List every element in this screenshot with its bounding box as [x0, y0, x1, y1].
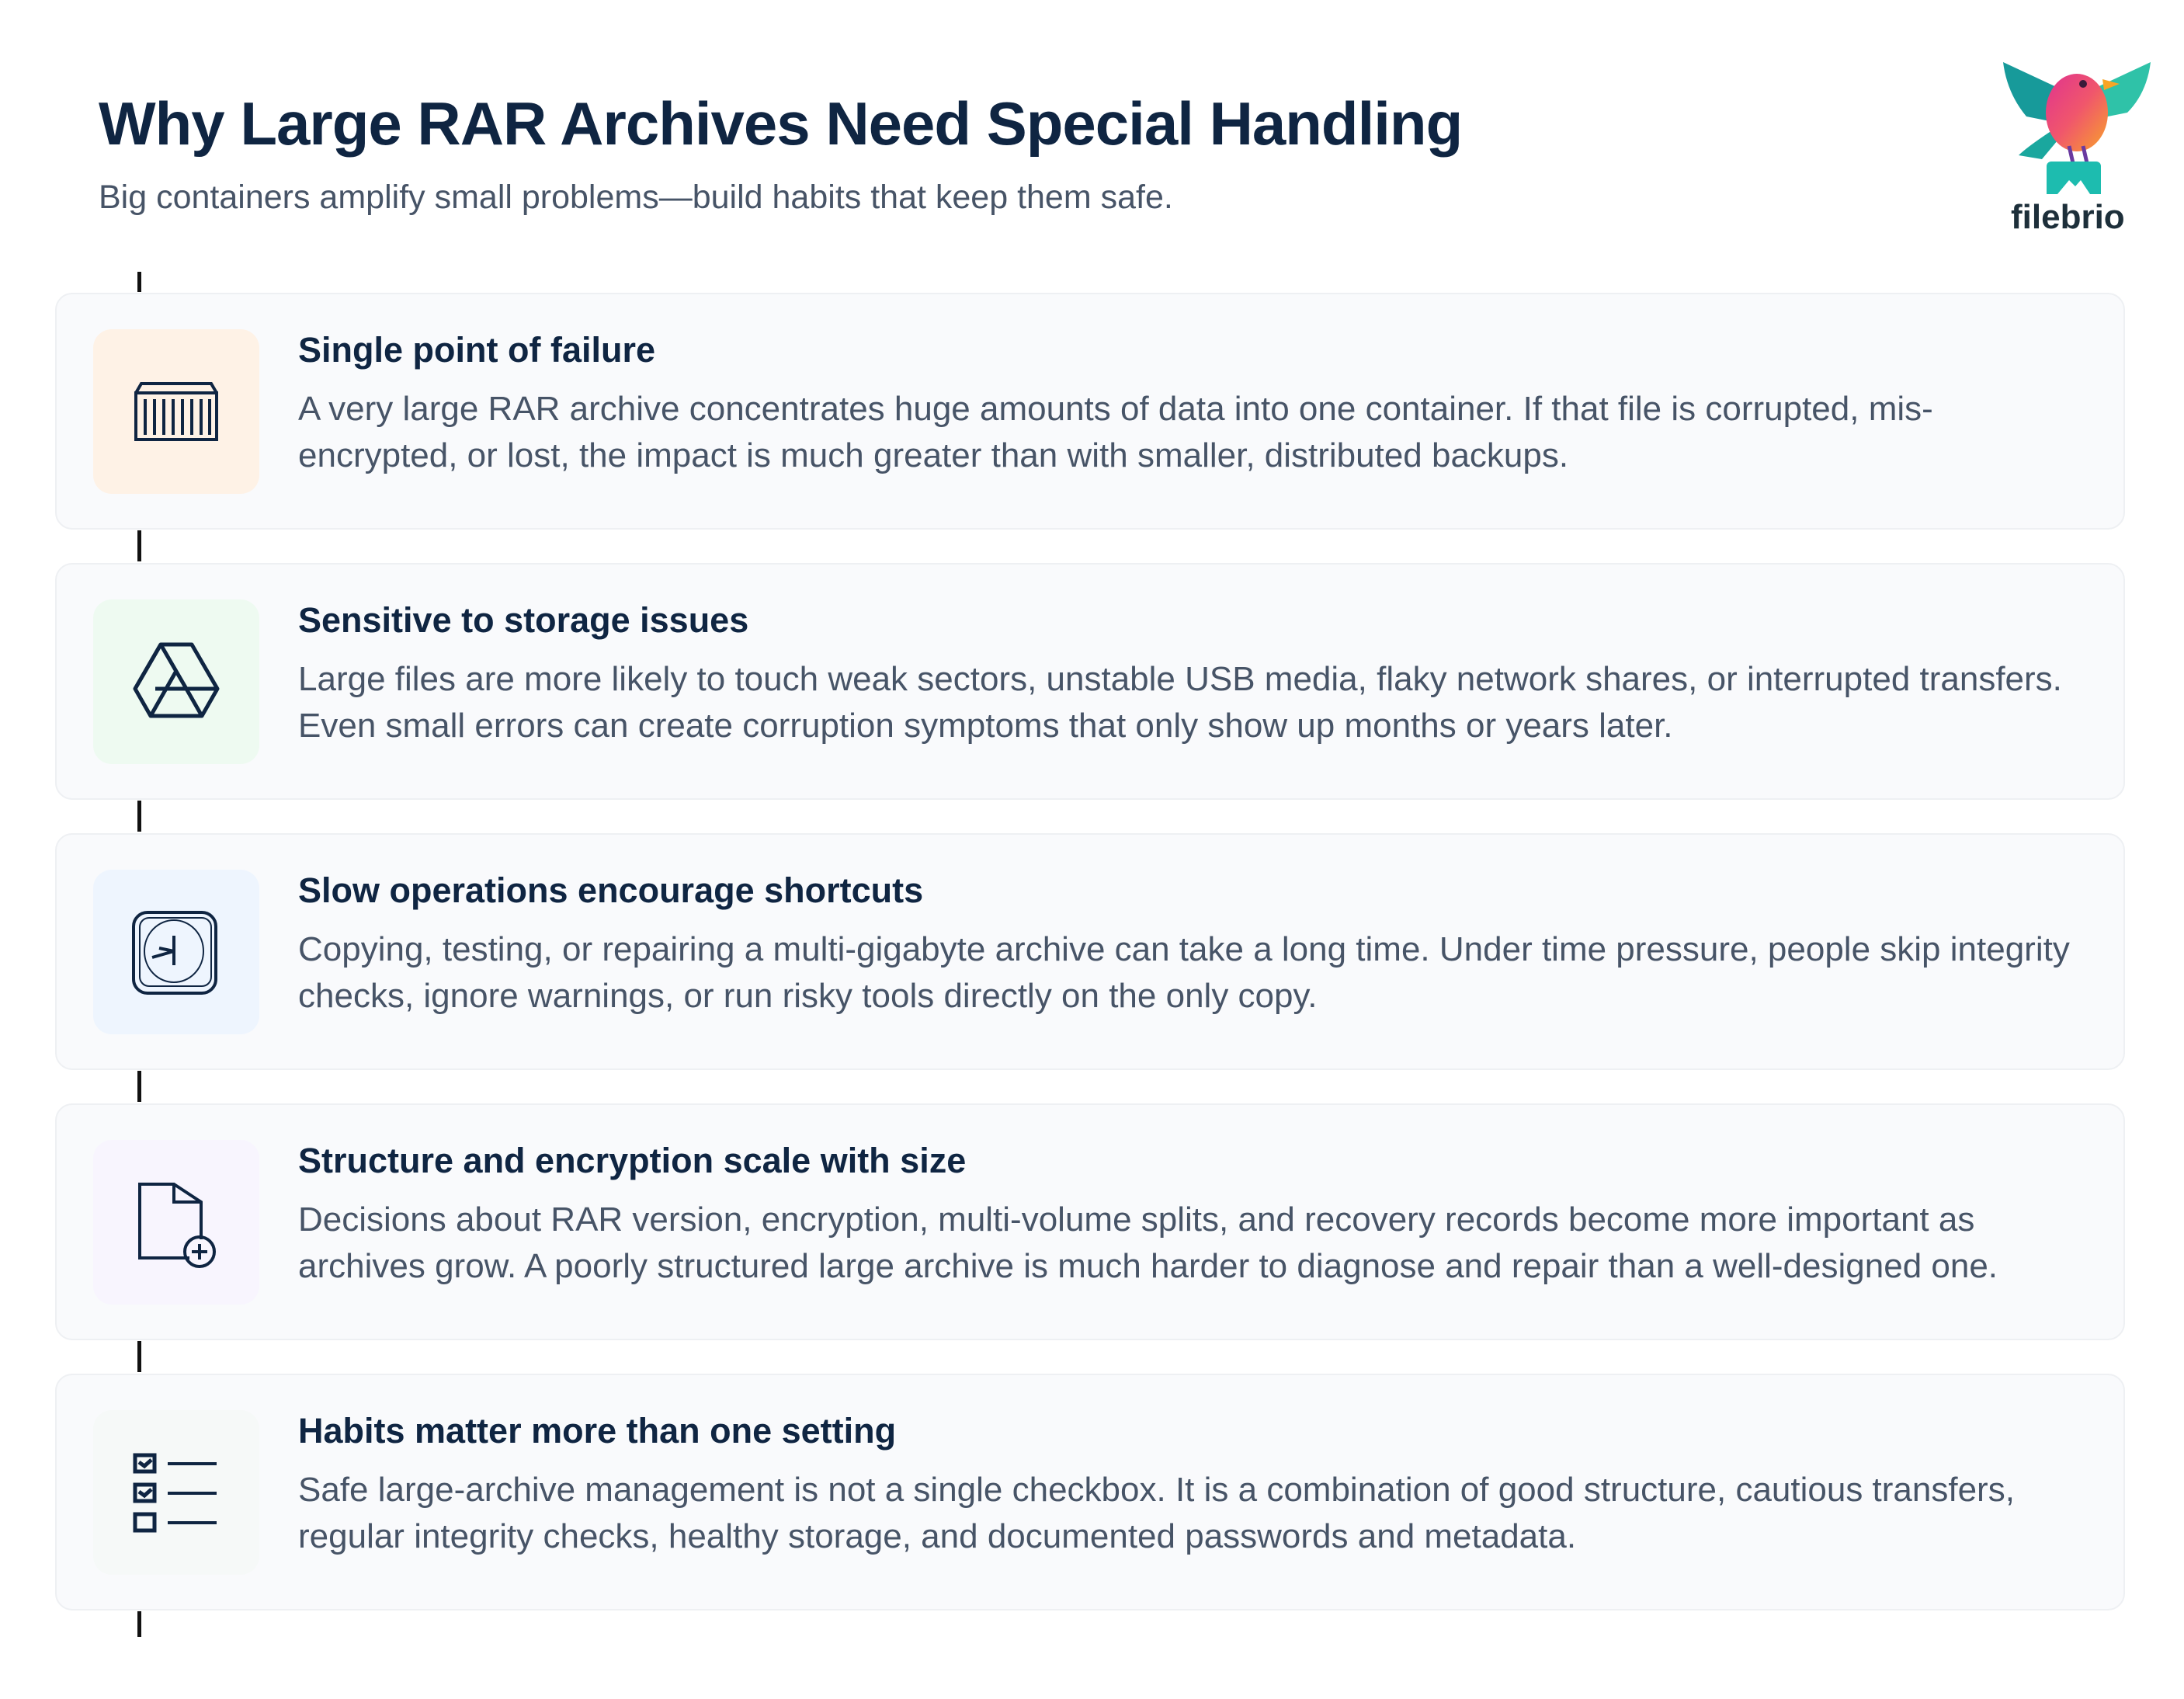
- text: A very large RAR archive concentrates huge amounts of data into one container. If that file is corrupted, mis-: [298, 390, 1933, 428]
- timeline segments: [137, 272, 141, 292]
- text: Decisions about RAR version, encryption, multi-volume splits, and recovery records become more important as: [298, 1200, 1974, 1239]
- text: checks, ignore warnings, or run risky tools directly on the only copy.: [298, 977, 1317, 1015]
- icon: container: [93, 329, 259, 494]
- panel: slow operations: [55, 833, 2125, 1070]
- panel: habits: [55, 1374, 2125, 1610]
- text: Copying, testing, or repairing a multi-gigabyte archive can take a long time. Under time pressure, people skip integrity: [298, 930, 2070, 968]
- text: [298, 660, 2062, 745]
- title: Why Large RAR Archives Need Special Handling: [99, 89, 1462, 158]
- logo: filebrio: filebrio: [2011, 198, 2125, 236]
- heading: Single point of failure: [298, 330, 655, 370]
- text: [298, 1200, 1998, 1285]
- panel: storage issues: [55, 563, 2125, 800]
- text: Safe large-archive management is not a single checkbox. It is a combination of good structure, cautious transfers,: [298, 1471, 2015, 1509]
- icon: checklist: [93, 1410, 259, 1575]
- panel: structure and encryption: [55, 1103, 2125, 1340]
- icon: clock: [93, 870, 259, 1034]
- heading: Slow operations encourage shortcuts: [298, 870, 923, 910]
- icon: document plus: [93, 1140, 259, 1305]
- icon: drive triangle: [93, 599, 259, 764]
- text: Even small errors can create corruption symptoms that only show up months or years later.: [298, 707, 1673, 745]
- subtitle: Big containers amplify small problems—build habits that keep them safe.: [99, 179, 1173, 216]
- heading: Structure and encryption scale with size: [298, 1141, 966, 1180]
- text: Large files are more likely to touch weak sectors, unstable USB media, flaky network shares, or interrupted transfers.: [298, 660, 2062, 698]
- heading: Habits matter more than one setting: [298, 1411, 896, 1451]
- heading: Sensitive to storage issues: [298, 600, 748, 640]
- text: archives grow. A poorly structured large archive is much harder to diagnose and repair than a well-designed one.: [298, 1247, 1998, 1285]
- logo: filebrio: [2003, 62, 2151, 236]
- text: [298, 1471, 2015, 1555]
- text: [298, 930, 2070, 1015]
- panel: single point of failure: [55, 293, 2125, 530]
- text: [298, 390, 1933, 474]
- text: regular integrity checks, healthy storage, and documented passwords and metadata.: [298, 1517, 1576, 1555]
- text: encrypted, or lost, the impact is much greater than with smaller, distributed backups.: [298, 436, 1568, 474]
